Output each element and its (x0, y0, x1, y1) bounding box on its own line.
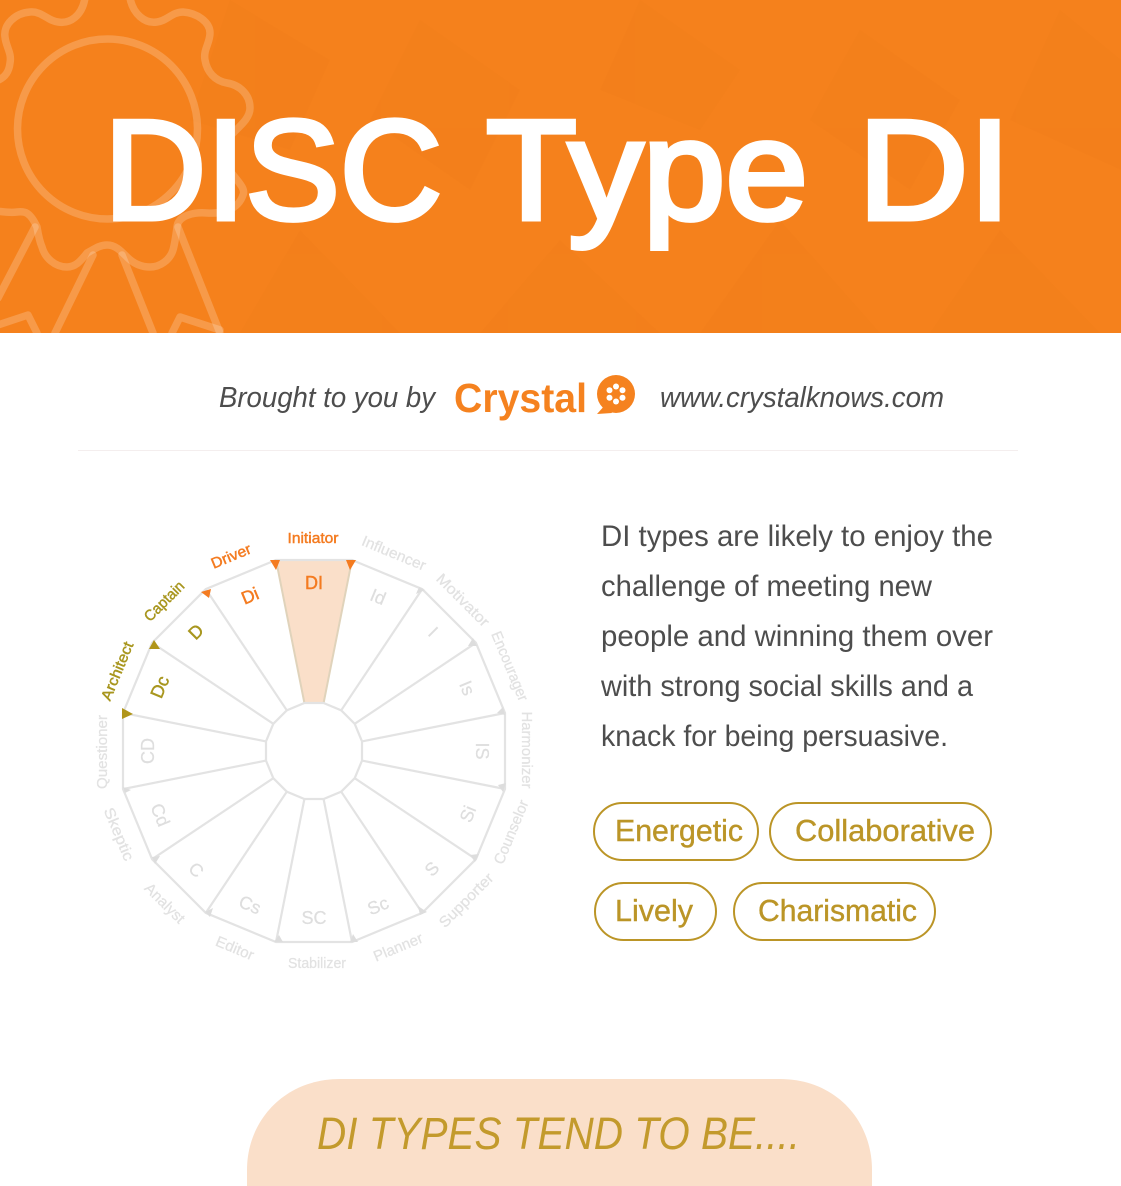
segment labels: Is (455, 678, 479, 698)
brought to you by line (219, 375, 944, 421)
pill: Lively (595, 883, 716, 940)
pill: Energetic: Energetic (615, 813, 743, 848)
outer type names (94, 530, 535, 972)
segment labels: Cs (236, 892, 264, 918)
segment labels: Dc (147, 673, 173, 701)
description paragraph (600, 520, 993, 753)
description paragraph: knack for being persuasive. (601, 720, 948, 753)
pill: Energetic (594, 803, 758, 860)
segment labels: CD (138, 738, 158, 764)
pill: Collaborative (770, 803, 991, 860)
brought to you by line: Brought to you by (219, 382, 436, 414)
outer type names: Skeptic (100, 805, 137, 864)
outer type names: Supporter (436, 870, 497, 931)
segment labels: D (184, 620, 208, 644)
pill: Lively: Lively (615, 893, 693, 928)
highlighted DI segment (276, 560, 352, 703)
pill: Charismatic (734, 883, 935, 940)
segment labels: Si (456, 803, 480, 825)
outer type names: Questioner (94, 715, 111, 789)
vertex markers (123, 587, 506, 942)
orange markers (201, 560, 356, 598)
section heading tab (247, 1079, 872, 1186)
segment labels: S (421, 858, 443, 880)
description paragraph: challenge of meeting new (601, 570, 932, 603)
segment labels: Cd (146, 801, 174, 829)
segment labels: Id (367, 585, 389, 609)
outer type names: Editor (213, 933, 256, 964)
pill: Charismatic: Charismatic (758, 893, 917, 928)
wheel outline and spokes (123, 560, 505, 942)
brought to you by line: www.crystalknows.com (660, 382, 944, 414)
outer type names: Analyst (141, 880, 189, 928)
segment labels: I (424, 623, 442, 641)
outer type names: Encourager (487, 629, 531, 704)
icon: award ribbon outline (0, 0, 250, 333)
outer type names: Motivator (432, 570, 493, 631)
segment labels (138, 573, 492, 928)
olive markers (122, 640, 160, 719)
outer type names: Driver (209, 541, 254, 573)
outer type names: Counselor (491, 798, 533, 867)
description paragraph: people and winning them over (601, 620, 993, 653)
title: DISC (104, 91, 442, 250)
title (104, 91, 1011, 250)
section heading tab: DI TYPES TEND TO BE.... (317, 1108, 800, 1159)
header banner (0, 0, 1121, 333)
title: Type (486, 91, 808, 250)
title: DI (858, 91, 1011, 250)
outer type names: Harmonizer (518, 712, 535, 788)
segment labels: IS (472, 742, 492, 760)
segment labels: SC (301, 908, 327, 928)
segment labels: DI (305, 573, 323, 593)
logo: Crystal wordmark: Crystal (454, 375, 587, 421)
trait pills (594, 803, 991, 940)
description paragraph: with strong social skills and a (600, 670, 973, 703)
wheel chart (94, 530, 535, 972)
segment labels: Sc (364, 893, 392, 919)
icon: Crystal speech bubble (597, 375, 635, 414)
pill: Collaborative: Collaborative (795, 813, 975, 848)
outer type names: Architect (98, 639, 138, 703)
outer type names: Stabilizer (288, 955, 346, 972)
outer type names: Influencer (359, 533, 428, 575)
outer type names: Initiator (288, 530, 338, 547)
segment labels: C (184, 858, 208, 882)
outer type names: Planner (371, 930, 426, 965)
description paragraph: DI types are likely to enjoy the (601, 520, 993, 553)
segment labels: Di (238, 583, 262, 608)
outer type names: Captain (141, 578, 188, 625)
